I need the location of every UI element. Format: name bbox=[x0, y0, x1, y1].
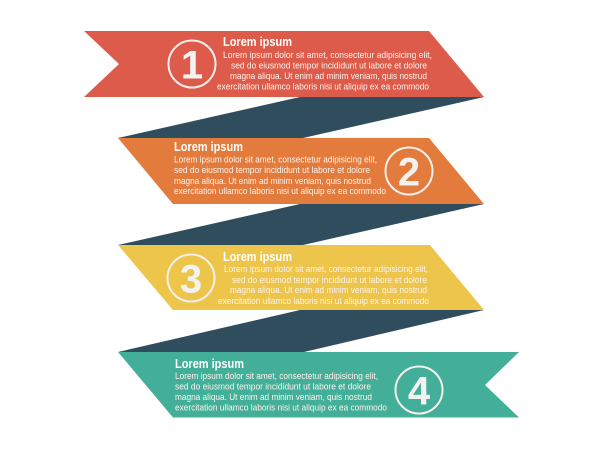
text block: banner 4: exercitation ullamco laboris nisi ut aliquip ex ea commodo bbox=[175, 402, 387, 414]
text block: banner 4: sed do eiusmod tempor incididunt ut labore et dolore bbox=[175, 382, 371, 392]
text block: banner 2 bbox=[174, 154, 386, 197]
icon: number 2 badge bbox=[386, 148, 432, 194]
text block: banner 1: sed do eiusmod tempor incididunt ut labore et dolore bbox=[231, 60, 427, 72]
text block: banner 2: Lorem ipsum dolor sit amet, consectetur adipisicing elit, bbox=[174, 154, 377, 166]
text block: banner 3: exercitation ullamco laboris nisi ut aliquip ex ea commodo bbox=[218, 296, 429, 307]
text block: banner 1: magna aliqua. Ut enim ad minim veniam, quis nostrud bbox=[230, 71, 427, 82]
banner 2 shape bbox=[118, 138, 484, 204]
icon: number 1 badge bbox=[168, 40, 216, 88]
text block: banner 3: magna aliqua. Ut enim ad minim veniam, quis nostrud bbox=[230, 285, 427, 296]
text block: banner 3 bbox=[218, 264, 429, 307]
panel: banner 4 bbox=[118, 352, 519, 418]
banner 1 shape bbox=[84, 31, 484, 97]
panel: banner 2 bbox=[118, 138, 484, 204]
text block: banner 4 bbox=[175, 371, 387, 414]
text block: banner 2: magna aliqua. Ut enim ad minim veniam, quis nostrud bbox=[174, 176, 371, 187]
ribbon fold: dark band between banners 3 and 4 bbox=[118, 310, 484, 352]
banner 3 shape bbox=[118, 245, 484, 310]
icon: number 1 badge: 1 bbox=[181, 44, 203, 88]
heading: banner 3: Lorem ipsum bbox=[223, 250, 292, 264]
text block: banner 1: exercitation ullamco laboris nisi ut aliquip ex ea commodo bbox=[217, 82, 429, 92]
panel: banner 3 bbox=[118, 245, 484, 310]
panel: banner 1 bbox=[84, 31, 484, 97]
text block: banner 3: Lorem ipsum dolor sit amet, consectetur adipisicing elit, bbox=[224, 264, 428, 275]
ribbon fold: dark band between banners 1 and 2 bbox=[118, 97, 484, 138]
heading: banner 2: Lorem ipsum bbox=[174, 140, 243, 154]
ribbon fold: dark band between banners 2 and 3 bbox=[118, 204, 484, 245]
banner 4 shape bbox=[118, 352, 519, 418]
icon: number 3 badge: 3 bbox=[180, 258, 202, 302]
icon: number 3 badge bbox=[168, 254, 214, 302]
icon: number 4 badge bbox=[396, 366, 442, 414]
icon: number 4 badge: 4 bbox=[408, 370, 431, 414]
text block: banner 4: magna aliqua. Ut enim ad minim veniam, quis nostrud bbox=[175, 392, 372, 403]
text block: banner 1 bbox=[217, 50, 432, 92]
icon: number 2 badge: 2 bbox=[398, 150, 420, 194]
text block: banner 2: exercitation ullamco laboris nisi ut aliquip ex ea commodo bbox=[174, 186, 386, 197]
text block: banner 1: Lorem ipsum dolor sit amet, consectetur adipisicing elit, bbox=[223, 50, 432, 61]
heading: banner 4: Lorem ipsum bbox=[175, 357, 244, 371]
heading: banner 1: Lorem ipsum bbox=[223, 35, 292, 49]
text block: banner 2: sed do eiusmod tempor incididunt ut labore et dolore bbox=[174, 165, 370, 176]
text block: banner 4: Lorem ipsum dolor sit amet, consectetur adipisicing elit, bbox=[175, 371, 378, 382]
text block: banner 3: sed do eiusmod tempor incididunt ut labore et dolore bbox=[232, 275, 427, 286]
